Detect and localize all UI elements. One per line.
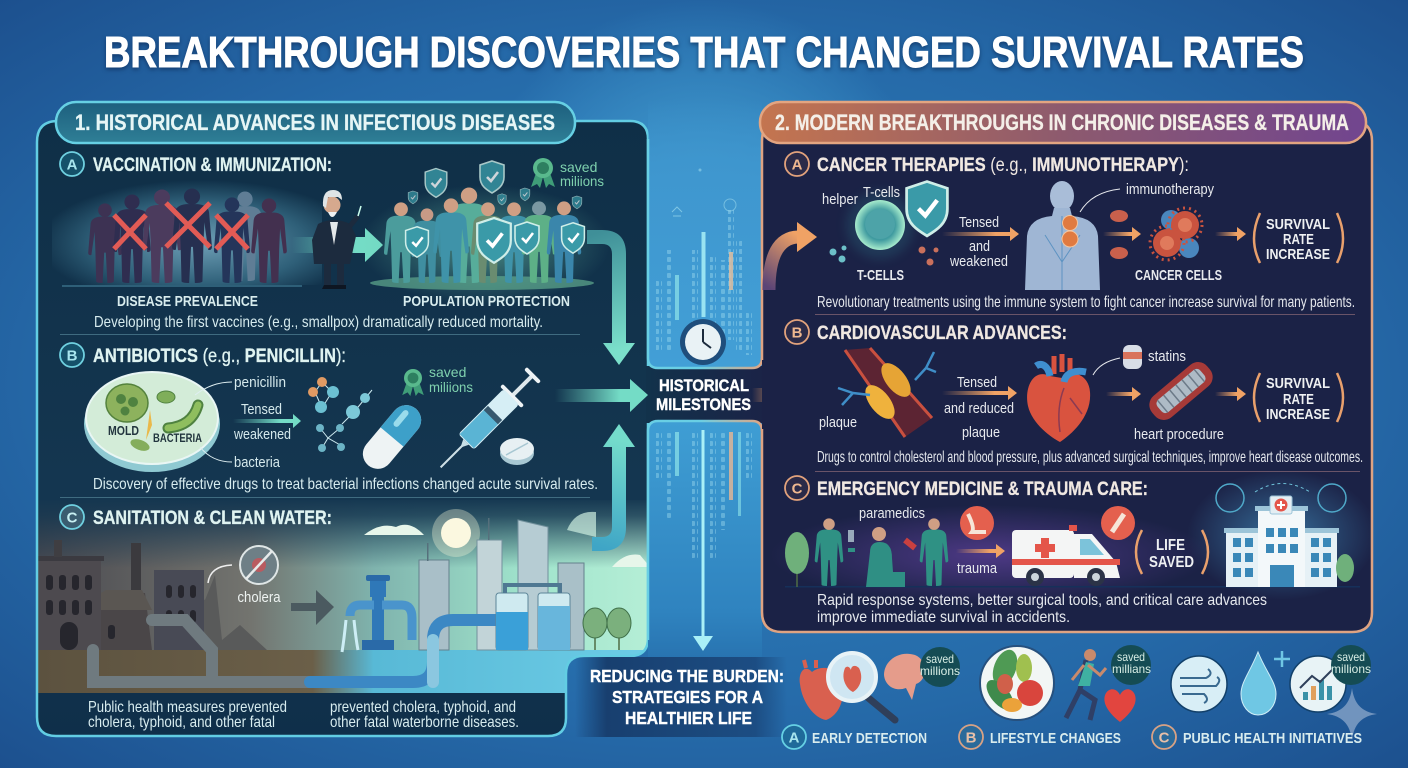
saved millions badge: miliions [429, 379, 473, 395]
arrow: to survival [1215, 387, 1246, 401]
label: paramedics: paramedics [859, 505, 925, 522]
arrow: T-cells to body [942, 227, 1019, 241]
molecules [308, 377, 372, 452]
faucet and tanks [342, 575, 570, 652]
watermark sparkle [1327, 688, 1377, 740]
strategy icon group: early detection: millions [920, 664, 960, 678]
timeline column: lower [648, 421, 762, 660]
label: and reduced: and reduced [944, 400, 1014, 417]
label: trauma: trauma [957, 560, 998, 577]
strategy icon group: public health initiatives: saved [1337, 650, 1365, 664]
section C description right: other fatal waterborne diseases. [330, 714, 519, 731]
arrow: sanitation to milestones [592, 424, 635, 551]
label: Tensed: Tensed [957, 374, 997, 391]
ground and water [37, 650, 649, 693]
label: T-CELLS: T-CELLS [857, 267, 904, 284]
strategy icon group: public health initiatives [1171, 645, 1371, 715]
disease prevalence figures [52, 180, 322, 287]
label: lifestyle changes: LIFESTYLE CHANGES [990, 730, 1121, 747]
survival rate increase callout: RATE [1283, 391, 1314, 408]
label: early detection: EARLY DETECTION [812, 730, 927, 747]
section C marker: C [792, 480, 803, 498]
label: immunotherapy: immunotherapy [1126, 181, 1214, 198]
timeline column: upper [648, 100, 762, 368]
section A marker [785, 152, 809, 176]
section A heading: VACCINATION & IMMUNIZATION: [93, 154, 332, 176]
section B heading: ANTIBIOTICS (e.g., PENICILLIN): [93, 345, 346, 367]
section C description left: cholera, typhoid, and other fatal [88, 714, 275, 731]
strategies heading: REDUCING THE BURDEN: [590, 666, 784, 686]
section C marker: C [67, 510, 78, 526]
section C heading: EMERGENCY MEDICINE & TRAUMA CARE: [817, 478, 1148, 500]
clean city [419, 518, 631, 650]
scientist figure [312, 190, 361, 289]
tree [785, 532, 809, 587]
survival rate increase callout: INCREASE [1266, 406, 1330, 423]
icon: clock [680, 319, 726, 365]
label: early detection: A [789, 730, 800, 746]
label: helper: helper [822, 191, 858, 208]
syringe [430, 363, 545, 478]
central dark band [646, 366, 764, 423]
label: statins: statins [1148, 348, 1186, 365]
panel: historical advances in infectious diseases [37, 121, 650, 736]
cholera crossed-out icon [208, 546, 281, 606]
label: weakened: weakened [233, 426, 291, 443]
petri dish with mold and bacteria: BACTERIA [153, 433, 202, 445]
strategy icon group: lifestyle changes: saved [1117, 650, 1145, 664]
cholera crossed-out icon: cholera [238, 589, 281, 606]
label: Tensed and weakened: weakened [949, 253, 1008, 270]
section B marker: B [792, 324, 803, 342]
label: historical milestones: MILESTONES [656, 395, 751, 414]
section A marker: A [67, 156, 78, 174]
arrow: timeline down to strategies [693, 430, 713, 651]
hospital glow [1187, 470, 1377, 600]
section B: cardiovascular advances [785, 320, 1363, 466]
arrow: antibiotics to milestones [555, 379, 648, 412]
label: penicillin: penicillin [234, 374, 286, 391]
section C: emergency medicine [770, 470, 1377, 626]
section B marker [60, 343, 84, 367]
label: Tensed: Tensed [241, 401, 282, 418]
strategy icon group: public health initiatives: millions [1331, 662, 1371, 676]
arrow: artery to heart [942, 386, 1017, 400]
section B marker [785, 320, 809, 344]
petri dish with mold and bacteria [84, 372, 232, 472]
paramedics [815, 518, 948, 587]
survival rate increase callout: RATE [1283, 231, 1314, 248]
arrow: polluted to clean [291, 590, 334, 625]
polluted city [38, 540, 267, 650]
strategies heading [575, 657, 787, 737]
section B description: Discovery of effective drugs to treat bacterial infections changed acute survival rates. [93, 476, 598, 493]
background glow behind timeline [470, 0, 940, 470]
capsule [357, 399, 427, 475]
arrow: heart to stent [1106, 387, 1141, 401]
label: bacteria: bacteria [234, 454, 281, 471]
panel header: section 1: 1. HISTORICAL ADVANCES IN INFECTIOUS DISEASES [75, 110, 555, 135]
arrow: to survival [1215, 227, 1246, 241]
section A: cancer therapies [785, 152, 1355, 311]
life saved callout [1136, 530, 1208, 574]
section C description: improve immediate survival in accidents. [817, 609, 1070, 626]
artery with plaque [838, 348, 936, 437]
arrow: penicillin effect [233, 414, 301, 428]
label: historical milestones: HISTORICAL [659, 376, 749, 395]
section A: vaccination and immunization [52, 152, 610, 331]
survival rate increase callout: SURVIVAL [1266, 375, 1330, 392]
label: cancer cells: CANCER CELLS [1135, 267, 1222, 284]
arrow: disease to protection [292, 228, 383, 262]
saved millions badge [402, 364, 473, 396]
section B: antibiotics [60, 343, 598, 493]
section C heading: SANITATION & CLEAN WATER: [93, 507, 332, 529]
population protection figures [360, 161, 610, 305]
label: T-cells: T-cells [863, 184, 900, 201]
arrow: milestones to cardiovascular [752, 379, 802, 412]
human body illustration [1025, 181, 1120, 290]
T-cell illustration [830, 182, 947, 266]
arrow: vaccination to milestones [587, 230, 635, 365]
pipe system [93, 620, 496, 682]
label: plaque: plaque [819, 414, 857, 431]
label: public health initiatives: PUBLIC HEALTH INITIATIVES [1183, 730, 1362, 747]
section B heading: CARDIOVASCULAR ADVANCES: [817, 322, 1067, 344]
pill [500, 438, 534, 465]
life saved callout: SAVED [1149, 554, 1194, 571]
section A heading: CANCER THERAPIES (e.g., IMMUNOTHERAPY): [817, 154, 1189, 176]
ambulance [1012, 525, 1120, 586]
survival rate increase callout: SURVIVAL [1266, 216, 1330, 233]
label: lifestyle changes [959, 725, 1121, 749]
section C heading block [60, 505, 332, 529]
saved millions badge [531, 158, 604, 189]
strategies heading: STRATEGIES FOR A [612, 687, 763, 707]
label: historical milestones [656, 376, 751, 414]
purple glow [770, 505, 1210, 605]
label: Tensed and weakened: Tensed [959, 214, 999, 231]
label: heart procedure: heart procedure [1134, 426, 1224, 443]
label: Tensed and weakened: and [969, 238, 990, 255]
panel header: section 1 [56, 102, 575, 143]
strategy icon group: early detection [800, 647, 960, 720]
section A marker: A [792, 156, 803, 174]
ground line [785, 586, 1360, 588]
icon: stent procedure [1144, 357, 1218, 425]
section B marker: B [67, 348, 78, 364]
label: plaque: plaque [962, 424, 1000, 441]
section C marker [785, 476, 809, 500]
panel header: section 2 [760, 102, 1366, 143]
icon: heart [1027, 354, 1090, 442]
hospital [1216, 484, 1354, 587]
life saved callout: LIFE [1156, 537, 1185, 554]
strategy icon group: lifestyle changes [980, 645, 1151, 722]
label: public health initiatives: C [1159, 730, 1170, 746]
saved millions badge: miliions [560, 173, 604, 189]
section A marker [60, 152, 84, 176]
arrow: milestones to cancer therapies [769, 222, 817, 290]
cancer cells cluster [1110, 208, 1202, 260]
icon: statins bottle [1093, 345, 1142, 375]
section C: sanitation and clean water illustration [37, 498, 650, 693]
survival rate increase callout: INCREASE [1266, 246, 1330, 263]
label: Tensed and weakened [949, 214, 1008, 270]
section C description right: prevented cholera, typhoid, and [330, 699, 516, 716]
section C description left: Public health measures prevented [88, 699, 287, 716]
section C description: Rapid response systems, better surgical tools, and critical care advances [817, 592, 1267, 609]
section A description: Developing the first vaccines (e.g., smallpox) dramatically reduced mortality. [94, 314, 543, 331]
panel: modern breakthroughs [762, 121, 1377, 632]
saved millions badge: saved [429, 364, 466, 380]
strategies heading: HEALTHIER LIFE [625, 708, 752, 728]
strategy icon group: lifestyle changes: millians [1112, 662, 1151, 676]
label: lifestyle changes: B [966, 730, 977, 746]
arrow: trauma to ambulance [956, 544, 1005, 558]
label: disease prevalence: DISEASE PREVALENCE [117, 293, 258, 310]
section C marker [60, 505, 84, 529]
petri dish with mold and bacteria: MOLD [108, 424, 139, 438]
survival rate increase callout [1254, 213, 1343, 263]
label: early detection [782, 725, 927, 749]
arrow: body to cancer cells [1103, 227, 1141, 241]
label: public health initiatives [1152, 725, 1362, 749]
icon: emergency tools [1101, 506, 1135, 540]
strategy icon group: early detection: saved [926, 652, 954, 666]
survival rate increase callout [1254, 373, 1343, 423]
label: population protection: POPULATION PROTECTION [403, 293, 570, 310]
icon: trauma [960, 506, 994, 540]
sun and clouds [364, 509, 650, 567]
saved millions badge: saved [560, 159, 597, 175]
